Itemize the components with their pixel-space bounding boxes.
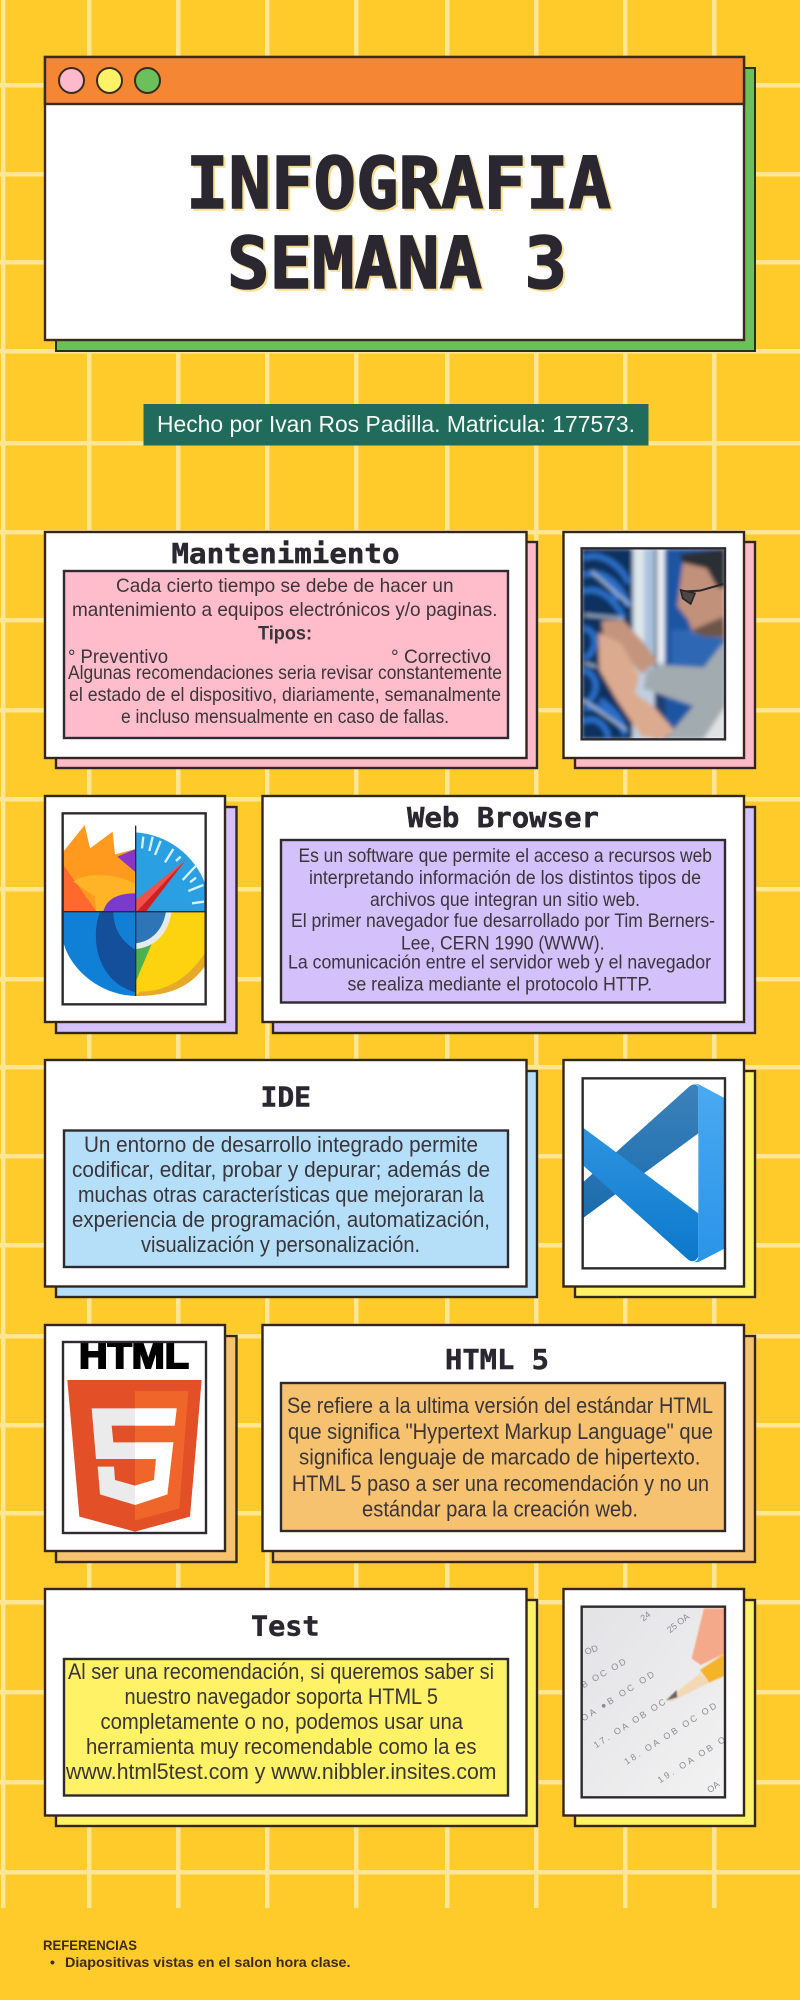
- references: REFERENCIAS: [43, 1937, 137, 1953]
- text box: test: nuestro navegador soporta HTML 5: [124, 1684, 438, 1709]
- text box: html 5: que significa "Hypertext Markup Language" que: [288, 1419, 713, 1444]
- title: INFOGRAFIA: [186, 142, 611, 225]
- panel: ide: [45, 1060, 537, 1297]
- panel: html 5: [262, 1325, 755, 1562]
- title: SEMANA 3: [227, 222, 567, 305]
- heading: web browser: Web Browser: [407, 802, 599, 834]
- photo: pencil on answer sheet: B OC OD: [579, 1656, 628, 1690]
- heading: test: Test: [251, 1610, 320, 1642]
- photo: pencil on answer sheet: 19. OA OB O: [656, 1734, 727, 1785]
- icon: vs code: [583, 1078, 725, 1268]
- text box: web browser: Lee, CERN 1990 (WWW).: [401, 932, 604, 954]
- text box: ide: Un entorno de desarrollo integrado permite: [84, 1132, 478, 1157]
- text box: mantenimiento: e incluso mensualmente en caso de fallas.: [121, 706, 449, 728]
- text box: mantenimiento: ° Correctivo: [391, 646, 491, 668]
- text box: test: [64, 1659, 508, 1796]
- photo: pencil on answer sheet: 25 OA: [665, 1611, 691, 1635]
- text box: ide: experiencia de programación, automatización,: [72, 1207, 490, 1232]
- photo: pencil on answer sheet: 17. OA OB OC: [592, 1697, 668, 1750]
- text box: ide: [64, 1130, 508, 1267]
- panel: vs code logo: [564, 1060, 755, 1297]
- photo: pencil on answer sheet: 18. OA OB OC OD: [622, 1700, 719, 1767]
- text box: web browser: [281, 840, 725, 1002]
- sweater: [643, 642, 725, 739]
- text box: mantenimiento: ° Preventivo: [68, 646, 168, 668]
- title: [186, 142, 611, 305]
- panel: web browser: [262, 796, 755, 1033]
- photo: pencil on answer sheet: OA: [705, 1779, 721, 1795]
- panel: title window: [45, 57, 755, 351]
- text box: mantenimiento: mantenimiento a equipos electrónicos y/o paginas.: [72, 599, 498, 621]
- text box: web browser: interpretando información de los distintos tipos de: [309, 867, 701, 889]
- heading: ide: IDE: [260, 1082, 311, 1114]
- text box: mantenimiento: Algunas recomendaciones seria revisar constantemente: [68, 662, 502, 684]
- arm and hands: [602, 620, 657, 674]
- text box: test: www.html5test.com y www.nibbler.insites.com: [65, 1759, 496, 1784]
- text box: html 5: estándar para la creación web.: [362, 1496, 638, 1522]
- panel: answer sheet photo: [564, 1589, 755, 1826]
- text box: web browser: Es un software que permite el acceso a recursos web: [298, 845, 712, 867]
- photo: pencil on answer sheet: OA ●B OC OD: [579, 1669, 657, 1723]
- text box: web browser: El primer navegador fue desarrollado por Tim Berners-: [291, 910, 715, 932]
- photo: pencil on answer sheet: 24: [638, 1609, 652, 1623]
- text box: test: Al ser una recomendación, si queremos saber si: [68, 1659, 494, 1684]
- text box: mantenimiento: Tipos:: [258, 622, 312, 644]
- text box: test: herramienta muy recomendable como la es: [86, 1734, 476, 1759]
- text box: web browser: archivos que integran un sitio web.: [370, 889, 640, 911]
- firefox quadrant: [63, 825, 136, 912]
- text box: web browser: La comunicación entre el servidor web y el navegador: [288, 952, 711, 974]
- text box: mantenimiento: el estado de el dispositivo, diariamente, semanalmente: [69, 684, 501, 706]
- text box: ide: visualización y personalización.: [141, 1232, 420, 1257]
- heading: mantenimiento: Mantenimiento: [172, 538, 400, 570]
- text box: web browser: se realiza mediante el protocolo HTTP.: [348, 974, 652, 996]
- subtitle banner: [144, 404, 648, 446]
- window title bar: [45, 57, 744, 104]
- text box: test: completamente o no, podemos usar una: [100, 1709, 464, 1734]
- chrome quadrant: [136, 912, 206, 996]
- text box: html 5: Se refiere a la ultima versión del estándar HTML: [287, 1393, 713, 1418]
- subtitle banner: Hecho por Ivan Ros Padilla. Matricula: 177573.: [157, 411, 635, 437]
- panel: technician photo: [564, 532, 755, 768]
- references: [43, 1937, 350, 1970]
- text box: html 5: significa lenguaje de marcado de hipertexto.: [299, 1444, 700, 1470]
- panel: test: [45, 1589, 537, 1826]
- text box: mantenimiento: Cada cierto tiempo se debe de hacer un: [116, 575, 454, 597]
- edge quadrant: [63, 912, 136, 996]
- photo: technician working on network cables: [582, 548, 725, 739]
- text box: html 5: [281, 1383, 725, 1531]
- text box: mantenimiento: [64, 571, 508, 738]
- references: •: [50, 1954, 55, 1970]
- panel: browsers logo: [45, 796, 236, 1033]
- icon: html5 shield: HTML: [79, 1335, 189, 1377]
- text box: ide: codificar, editar, probar y depurar; además de: [72, 1157, 490, 1182]
- heading: html 5: HTML 5: [445, 1344, 549, 1376]
- photo: pencil on answer sheet: OD: [583, 1643, 600, 1657]
- text box: html 5: HTML 5 paso a ser una recomendación y no un: [292, 1471, 709, 1496]
- photo: pencil on answer sheet: [579, 1607, 727, 1797]
- icon: web browser logos collage: [63, 813, 206, 1004]
- panel: html5 logo: [45, 1325, 236, 1562]
- panel: mantenimiento: [45, 532, 537, 768]
- icon: html5 shield: [63, 1335, 206, 1533]
- references: Diapositivas vistas en el salon hora clase.: [65, 1954, 350, 1970]
- text box: ide: muchas otras características que mejoraran la: [78, 1182, 485, 1207]
- safari quadrant: [136, 832, 206, 912]
- head: [677, 553, 725, 638]
